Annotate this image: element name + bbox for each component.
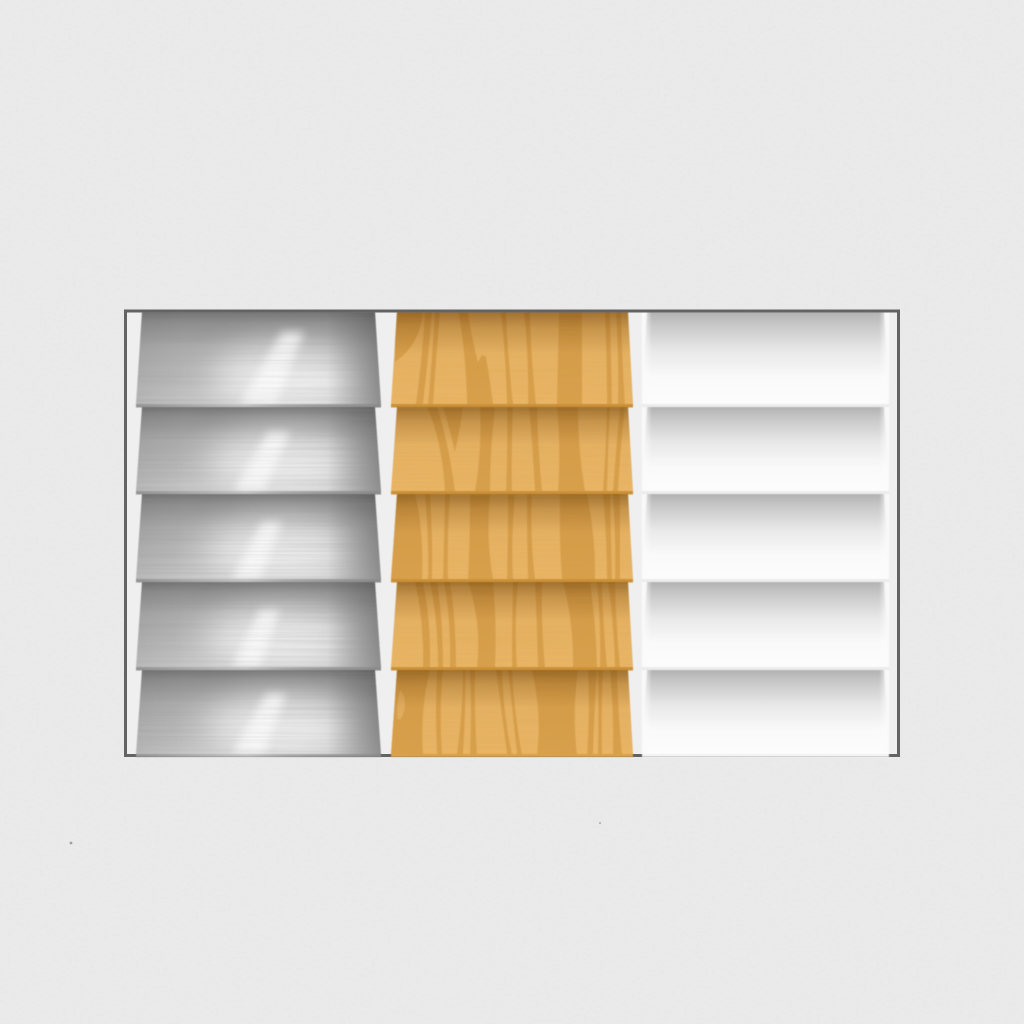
white slat 3 xyxy=(642,494,889,582)
wood slat 4 xyxy=(391,582,633,670)
infographic: three columns of slats xyxy=(70,310,900,844)
metal slat 3 xyxy=(136,494,381,584)
white slat 2 xyxy=(642,407,889,494)
metal slat 1 xyxy=(136,312,381,414)
panel: brushed metal column xyxy=(136,312,381,760)
white slat 1 xyxy=(642,312,889,407)
wood slat 3 xyxy=(391,494,633,582)
wood slat 1 xyxy=(391,312,633,408)
white slat 4 xyxy=(642,582,889,670)
panel: white column xyxy=(642,312,889,757)
wood slat 2 xyxy=(391,407,633,494)
panel: wood column xyxy=(391,312,633,757)
frame top edge xyxy=(124,310,900,312)
metal slat 5 xyxy=(136,670,381,760)
metal slat 2 xyxy=(136,407,381,496)
metal slat 4 xyxy=(136,582,381,672)
white slat 5 xyxy=(642,670,889,757)
wood slat 5 xyxy=(391,670,633,757)
frame xyxy=(126,311,898,756)
